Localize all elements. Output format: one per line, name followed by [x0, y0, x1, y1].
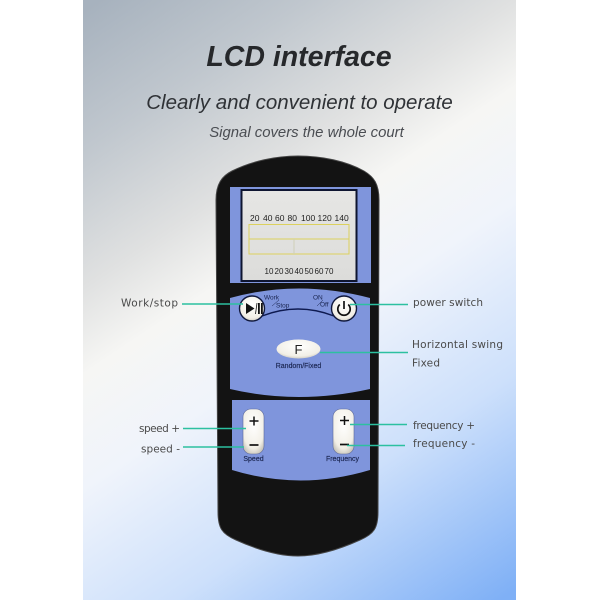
LCD screen: 40	[263, 213, 273, 223]
tagline: Signal covers the whole court	[209, 125, 405, 141]
on off caption	[313, 294, 329, 308]
speed caption: Speed	[243, 456, 264, 463]
LCD screen: 120	[318, 213, 332, 223]
LCD screen	[242, 190, 356, 281]
callout: speed plus	[139, 423, 246, 435]
speed button	[243, 409, 264, 454]
screen surround	[230, 187, 371, 283]
remote body	[216, 156, 379, 556]
LCD screen: 40	[294, 267, 304, 276]
callout: frequency minus: frequency -	[413, 438, 475, 450]
lower control panel	[232, 400, 370, 480]
LCD screen: 60	[275, 213, 285, 223]
upper scale: 20	[250, 213, 260, 223]
callout: horizontal swing and fixed: Fixed	[412, 358, 440, 370]
icon: power button	[332, 296, 356, 321]
random fixed caption: Random/Fixed	[276, 363, 321, 370]
frequency button	[333, 409, 354, 454]
middle control panel	[230, 288, 370, 397]
icon: play pause button	[240, 296, 264, 321]
LCD screen: 80	[288, 213, 297, 223]
title: LCD interface	[206, 41, 392, 73]
button arc	[262, 309, 334, 316]
callout: horizontal swing and fixed: Horizontal swing	[412, 339, 503, 351]
LCD screen: 20	[274, 267, 284, 276]
callout: horizontal swing and fixed	[320, 339, 503, 370]
LCD screen: 60	[314, 267, 324, 276]
callout: work stop	[121, 298, 243, 310]
callout: frequency plus	[350, 420, 475, 432]
callout: speed minus: speed -	[141, 444, 180, 456]
callout: frequency minus	[347, 438, 475, 450]
callout: speed minus	[141, 444, 244, 456]
work stop caption: Work	[264, 294, 280, 302]
LCD grid	[249, 224, 349, 254]
work stop caption	[264, 294, 290, 310]
work stop caption: Stop	[276, 302, 290, 310]
background panel	[83, 0, 516, 600]
LCD screen: 50	[304, 267, 314, 276]
LCD screen: 30	[284, 267, 294, 276]
callout: power switch: power switch	[413, 297, 483, 309]
lower scale: 10	[264, 267, 274, 276]
remote control	[216, 156, 379, 556]
on off caption: ON	[313, 294, 323, 302]
LCD screen: 100	[301, 213, 315, 223]
frequency caption: Frequency	[326, 456, 360, 463]
callout: frequency plus: frequency +	[413, 420, 475, 432]
callout: work stop: Work/stop	[121, 298, 178, 310]
F button: F	[295, 342, 303, 357]
F button	[276, 340, 320, 358]
LCD screen: 140	[334, 213, 349, 223]
subtitle: Clearly and convenient to operate	[146, 91, 453, 114]
callout: power switch	[350, 297, 483, 309]
LCD screen: 70	[324, 267, 334, 276]
on off caption: Off	[320, 302, 329, 308]
callout: speed plus: speed +	[139, 423, 180, 435]
